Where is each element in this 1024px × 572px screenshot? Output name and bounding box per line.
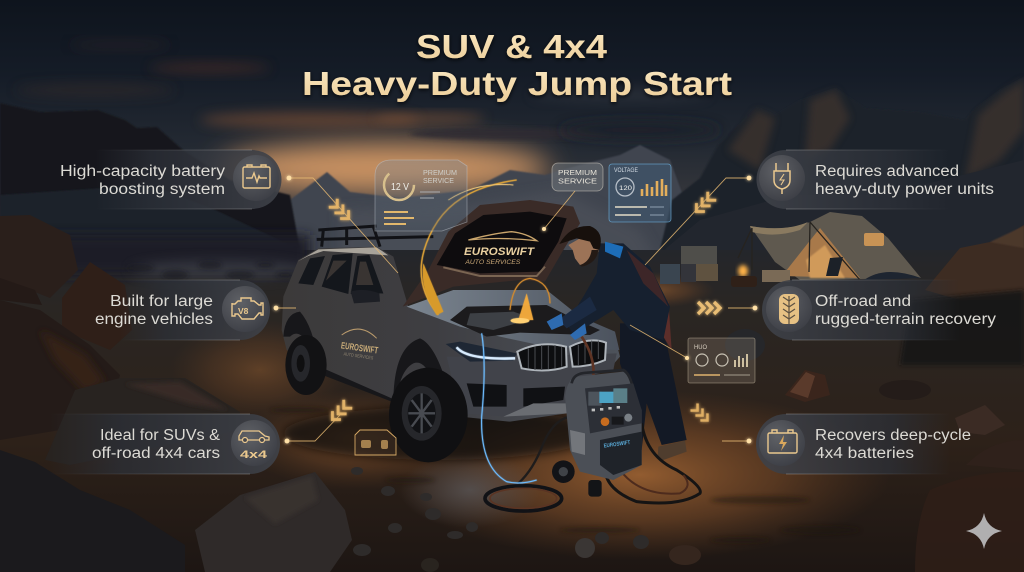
background: camp tent	[738, 212, 921, 282]
title: SUV & 4x4	[416, 28, 608, 65]
connector glow dots	[274, 176, 757, 443]
callout text	[815, 163, 994, 198]
hud panel: premium service: PREMIUM	[558, 168, 597, 177]
kidney grille	[517, 340, 606, 370]
callout text: engine vehicles	[95, 311, 213, 328]
door mirror	[351, 290, 380, 303]
hud panel: HUD readout	[688, 338, 755, 383]
suv body	[282, 247, 620, 422]
icon: SUV 4x4: 4x4	[240, 449, 268, 461]
connector lines	[276, 178, 755, 441]
callout text: rugged-terrain recovery	[815, 311, 996, 328]
hud panel: 12 V gauge: PREMIUM	[423, 170, 457, 177]
callout text: Recovers deep-cycle	[815, 427, 971, 444]
callout: high-capacity battery	[60, 150, 282, 209]
icon: tyre tread	[766, 286, 812, 332]
spark at engine	[511, 293, 533, 323]
background: desert ground	[0, 235, 1024, 572]
callout text: 4x4 batteries	[815, 445, 914, 462]
callout: deep-cycle batteries	[756, 414, 971, 474]
icon: sparkle watermark	[966, 513, 1002, 549]
callout text: heavy-duty power units	[815, 181, 994, 198]
engine bay	[450, 305, 600, 337]
hud panel: 12 V gauge: SERVICE	[423, 178, 454, 185]
callout text	[815, 427, 971, 462]
callout text	[95, 293, 213, 328]
hud panel: 12 V gauge	[375, 160, 467, 231]
hud panel: HUD readout: HUO	[694, 345, 707, 351]
callout: SUVs and 4x4	[50, 414, 280, 474]
booster pack: EUROSWIFT	[603, 440, 631, 450]
booster pack	[552, 370, 642, 497]
open hood	[403, 200, 580, 307]
icon: V8 engine: V8	[238, 306, 249, 316]
callout text: Built for large	[110, 293, 213, 310]
front bumper	[447, 353, 617, 417]
car shadow	[283, 407, 597, 460]
hud panel: premium service	[552, 163, 603, 191]
callout text	[60, 163, 225, 198]
chevrons: lower left	[328, 400, 352, 424]
wheel arches and side step	[283, 312, 455, 417]
icon: power plug	[759, 155, 805, 201]
rear wheel	[285, 335, 327, 395]
front wheel	[389, 368, 468, 462]
background: rocks	[0, 215, 1024, 572]
hud panel: premium service: SERVICE	[558, 176, 597, 186]
title: Heavy-Duty Jump Start	[302, 65, 732, 102]
title	[302, 28, 732, 102]
background: mountains	[0, 77, 1024, 300]
callout text: Off-road and	[815, 293, 911, 310]
icon: battery with bolt	[759, 420, 805, 466]
callout text: Ideal for SUVs &	[100, 427, 221, 444]
central scene, drawn in a zoomed coordinate frame	[282, 180, 700, 511]
icon: battery with pulse	[233, 155, 279, 201]
side door logo: EUROSWIFT	[340, 340, 379, 356]
side windows	[298, 253, 383, 294]
callout text	[92, 427, 221, 462]
callout text: Requires advanced	[815, 163, 959, 180]
callout: off-road recovery	[762, 280, 996, 340]
side door logo: AUTO SERVICES	[343, 351, 374, 360]
cables	[482, 333, 700, 511]
background: camp boxes and fire	[660, 246, 757, 287]
open hood: EUROSWIFT	[464, 246, 535, 258]
callout text: High-capacity battery	[60, 163, 225, 180]
callout text	[815, 293, 996, 328]
chevrons: upper right	[692, 192, 716, 216]
chevrons: upper left	[329, 199, 353, 223]
hud panel: voltage chart: 120	[619, 185, 632, 192]
background: dusk desert sky	[0, 0, 1024, 300]
background: small stones	[351, 467, 701, 572]
hud panel: 12 V gauge: 12 V	[391, 181, 409, 193]
roof highlight	[297, 247, 388, 262]
icon: SUV 4x4	[231, 420, 277, 466]
hud panel: voltage chart: VOLTAGE	[614, 168, 638, 174]
roof rack	[317, 226, 433, 247]
mechanic	[547, 226, 687, 461]
hood surface	[407, 290, 619, 350]
mechanic hair	[559, 226, 601, 250]
chevrons: lower right	[690, 403, 711, 424]
callout: heavy-duty power units	[756, 150, 994, 209]
mechanic face	[568, 237, 599, 265]
callout text: off-road 4x4 cars	[92, 445, 220, 462]
hud panel: small dashboard icon	[355, 430, 396, 455]
open hood: AUTO SERVICES	[464, 259, 521, 266]
hud panel: voltage chart	[609, 164, 671, 222]
chevrons: middle right	[698, 302, 720, 314]
glowing arc	[421, 180, 550, 315]
side door logo	[340, 329, 379, 360]
callout: large engine	[95, 280, 270, 340]
headlight	[446, 342, 517, 362]
callout text: boosting system	[99, 181, 225, 198]
icon: V8 engine	[222, 286, 268, 332]
